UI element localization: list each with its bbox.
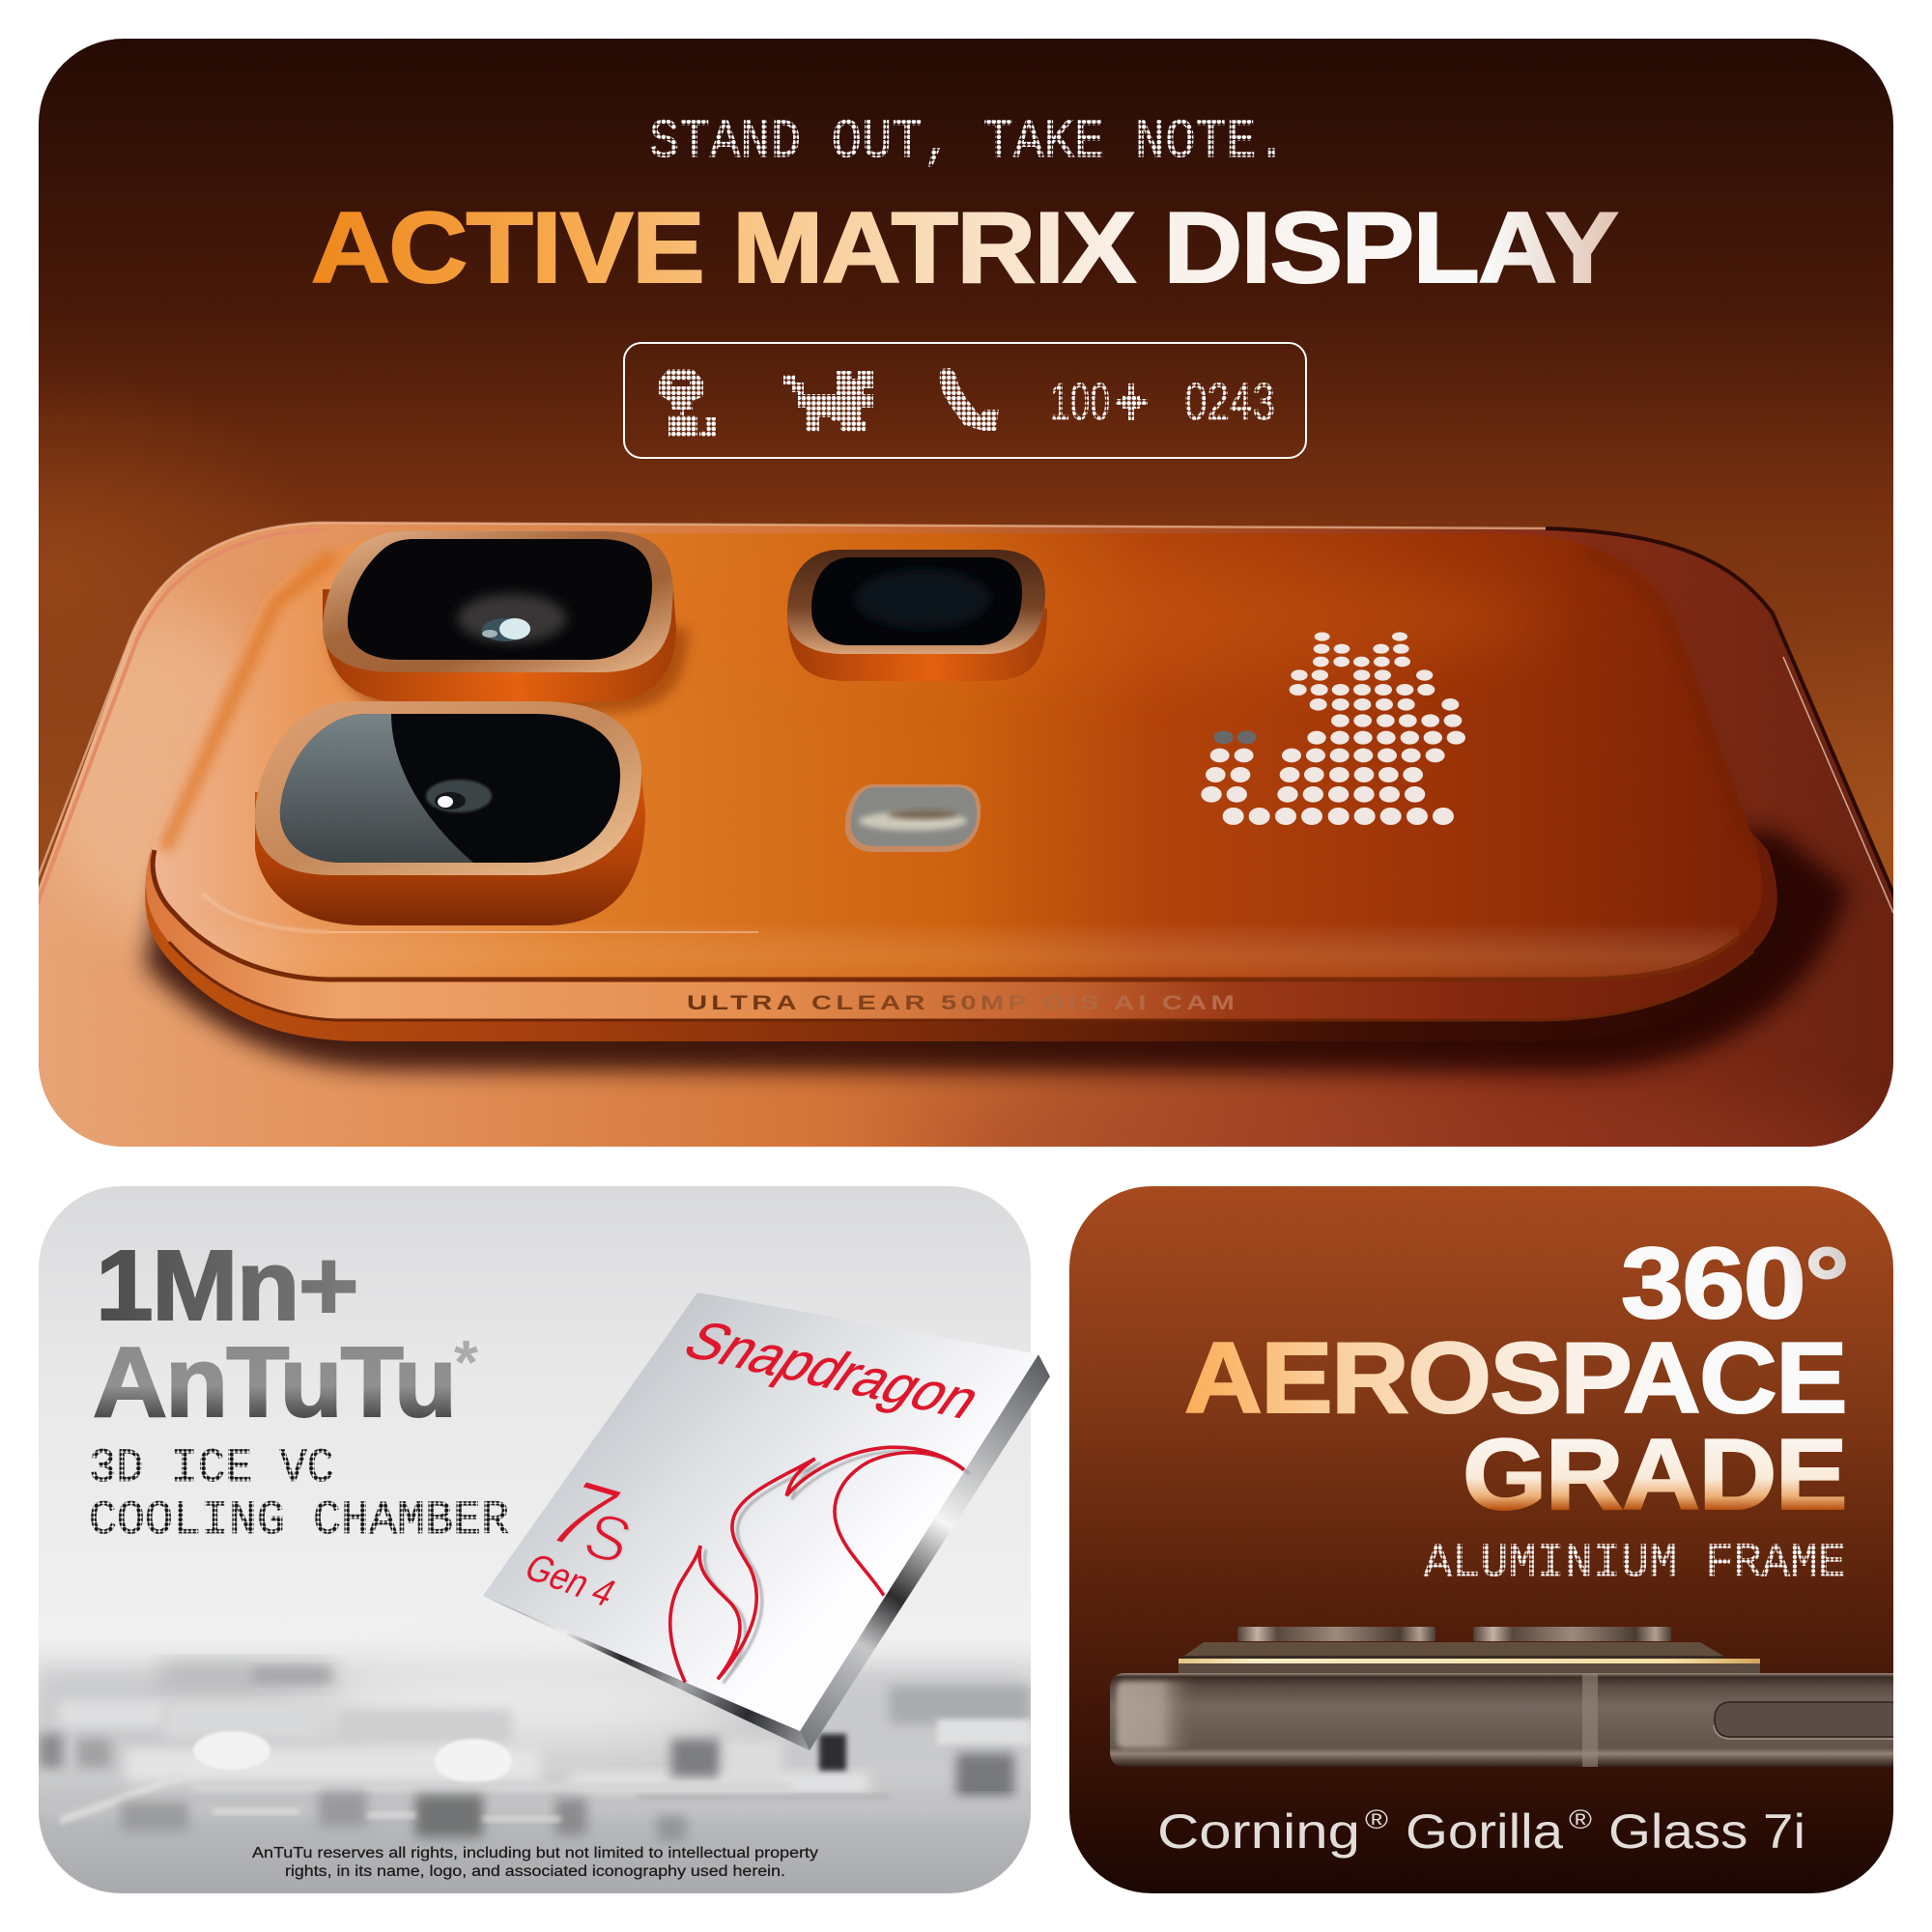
side button [1714,1702,1898,1739]
Snapdragon wordmark: Snapdragon [672,1311,993,1430]
camera module lower plate [145,831,1783,1041]
lens: bottom left camera [255,701,645,925]
lens: top left camera [323,531,688,713]
Gen 4: Gen 4 [517,1545,624,1614]
cooling chamber text: 3D ICE VC [89,1441,334,1495]
camera bumps [1179,1627,1760,1673]
Corning Gorilla Glass text: Corning [1157,1804,1360,1859]
lens: middle camera [787,550,1047,681]
frame body [1110,1673,1893,1767]
phone back body [24,523,1908,1203]
heading: AEROSPACE: AEROSPACE [1184,1322,1846,1435]
icon: dot matrix cat on phone [1201,632,1465,825]
heading: 1Mn+: 1Mn+ [96,1230,357,1341]
icon: phone handset [940,368,999,431]
battery text: 100 [1050,373,1110,431]
legal disclaimer: AnTuTu reserves all rights, including but not limited to intellectual property [252,1845,818,1861]
legal disclaimer: rights, in its name, logo, and associated iconography used herein. [285,1863,785,1880]
Corning Gorilla Glass text: ® [1365,1804,1388,1834]
phone side view [1110,1627,1898,1767]
engraved label: ULTRA CLEAR 50MP OIS AI CAM [687,992,1238,1014]
aluminium frame text: ALUMINIUM FRAME [1424,1536,1846,1590]
Corning Gorilla Glass text: Glass 7i [1608,1804,1805,1859]
flash [845,784,980,852]
asterisk: * [454,1327,478,1397]
clock text: 0243 [1184,373,1275,431]
chip face [483,1293,1038,1731]
heading: GRADE: GRADE [1463,1419,1846,1531]
cooling chamber text [89,1441,509,1548]
icon: dog [783,371,873,432]
legal disclaimer [252,1845,818,1880]
chip bevels [483,1354,1050,1750]
cooling chamber text: COOLING CHAMBER [89,1493,509,1548]
panel: AnTuTu performance [39,1186,1031,1893]
antenna band [1582,1673,1598,1767]
flame logo [670,1447,970,1683]
Corning Gorilla Glass text [1157,1804,1805,1859]
camera module upper plate [151,533,1762,980]
heading: 360 degrees: 360° [1621,1228,1848,1340]
panel: aluminium frame [1069,1186,1898,1893]
Corning Gorilla Glass text: ® [1569,1804,1592,1834]
heading: AnTuTu: AnTuTu [93,1326,455,1437]
display strip [624,343,1306,458]
panel: active matrix display [0,39,1932,1203]
title: ACTIVE MATRIX DISPLAY [311,192,1617,304]
model number 7s: 7 [527,1463,639,1568]
tagline: STAND OUT, TAKE NOTE. [649,112,1287,174]
Corning Gorilla Glass text: Gorilla [1406,1804,1563,1859]
model number 7s: S [574,1499,641,1578]
dot matrix icons [659,368,1275,437]
icon: charge arrow [1116,384,1148,420]
blurred circuit board background [39,1657,1031,1841]
camera module shadow [145,831,1850,1072]
Snapdragon chip [483,1293,1050,1750]
icon: figure [659,369,716,437]
